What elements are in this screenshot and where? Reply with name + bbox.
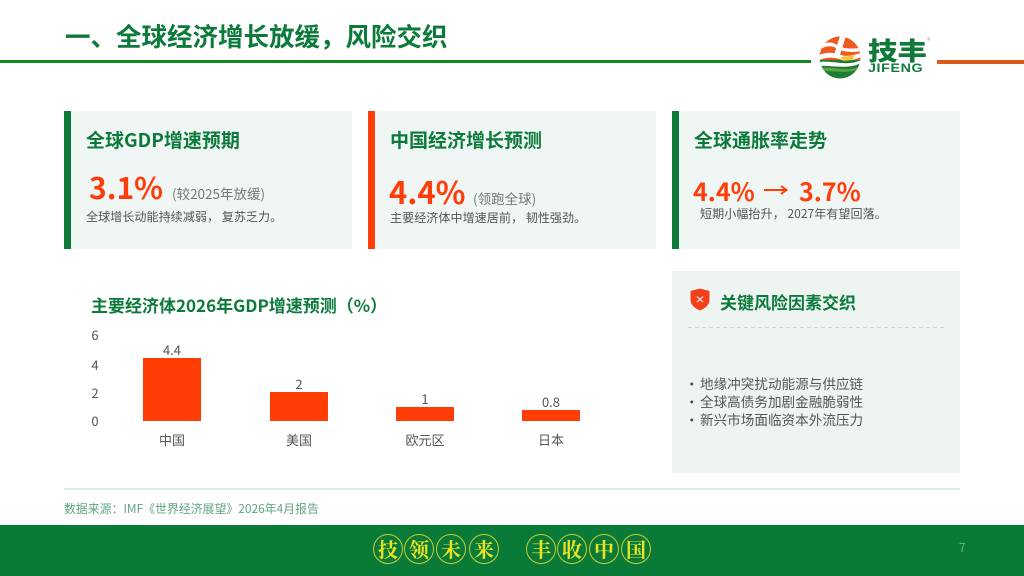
bar: China 4.4: 中国 xyxy=(159,430,185,449)
slogan: 技领未来 丰收中国: 来 xyxy=(474,534,494,563)
risk item: • xyxy=(685,409,699,429)
y axis labels xyxy=(91,325,99,430)
bar chart xyxy=(91,325,580,449)
panel: global inflation trend xyxy=(672,111,960,249)
header green rule xyxy=(0,60,811,63)
slogan: 技领未来 丰收中国: 领 xyxy=(409,534,429,563)
slogan: 技领未来 丰收中国 xyxy=(373,534,651,564)
title: 一、全球经济增长放缓，风险交织 xyxy=(65,17,448,54)
y axis labels: 2 xyxy=(91,383,99,402)
risk item: 地缘冲突扰动能源与供应链 xyxy=(700,373,863,393)
bar: USA 2: 美国 xyxy=(286,430,312,449)
y axis labels: 6 xyxy=(91,325,99,344)
slogan: 技领未来 丰收中国: 中 xyxy=(594,534,614,563)
slogan: 技领未来 丰收中国: 国 xyxy=(626,534,646,563)
bar: Japan 0.8: 日本 xyxy=(538,430,564,449)
y axis labels: 0 xyxy=(91,411,99,430)
figure note: (领跑全球) xyxy=(473,188,536,208)
slogan: 技领未来 丰收中国: 丰 xyxy=(531,534,551,563)
description: 短期小幅抬升， 2027年有望回落。 xyxy=(700,205,887,222)
card heading: 全球通胀率走势 xyxy=(694,126,827,153)
footer divider xyxy=(64,488,960,490)
accent bar xyxy=(64,111,71,249)
risk item: • xyxy=(685,391,699,411)
logo name: 技丰 xyxy=(868,32,927,68)
description: 全球增长动能持续减弱， 复苏乏力。 xyxy=(86,208,282,225)
logo emblem xyxy=(820,36,860,78)
dashed divider xyxy=(688,327,944,328)
accent bar xyxy=(672,111,679,249)
logo registered mark: ® xyxy=(927,36,930,46)
risk item: • xyxy=(685,373,699,393)
data source: 数据来源：IMF《世界经济展望》2026年4月报告 xyxy=(64,500,319,517)
key figure target: 3.7% xyxy=(799,173,861,209)
slogan: 技领未来 丰收中国: 未 xyxy=(441,534,461,563)
logo: JIFENG xyxy=(820,32,930,78)
logo latin name: JIFENG xyxy=(868,63,923,75)
risk item: 新兴市场面临资本外流压力 xyxy=(700,409,863,429)
bar: China 4.4 xyxy=(143,340,201,449)
icon: shield xyxy=(690,288,710,310)
panel: global GDP forecast xyxy=(64,111,352,249)
risk heading: 关键风险因素交织 xyxy=(720,289,856,314)
bar: Eurozone 1: 1 xyxy=(421,389,429,408)
y axis labels: 4 xyxy=(91,355,99,374)
trend arrow xyxy=(764,185,788,195)
bar: Japan 0.8: 0.8 xyxy=(542,392,560,411)
panel: China growth forecast xyxy=(368,111,656,249)
risk item: 全球高债务加剧金融脆弱性 xyxy=(700,391,863,411)
bar: China 4.4: 4.4 xyxy=(163,340,181,359)
key figure: 4.4% xyxy=(389,168,466,213)
bar: USA 2: 2 xyxy=(295,374,303,393)
description: 主要经济体中增速居前， 韧性强劲。 xyxy=(390,209,586,226)
bar: Japan 0.8 xyxy=(522,392,580,449)
card heading: 全球GDP增速预期 xyxy=(86,126,240,153)
footer band xyxy=(0,525,1024,576)
header orange rule xyxy=(937,60,1024,64)
bar: Eurozone 1 xyxy=(396,389,454,449)
panel: key risk factors xyxy=(672,271,960,473)
key figure: 4.4% xyxy=(693,173,755,209)
slogan: 技领未来 丰收中国: 收 xyxy=(562,534,582,563)
key figure: 3.1% xyxy=(89,164,163,208)
figure note: (较2025年放缓) xyxy=(172,183,265,203)
page number: 7 xyxy=(959,539,966,556)
chart heading: 主要经济体2026年GDP增速预测（%） xyxy=(91,292,387,317)
bar: USA 2 xyxy=(270,374,328,449)
risk list xyxy=(685,373,863,429)
card heading: 中国经济增长预测 xyxy=(390,126,542,153)
slogan: 技领未来 丰收中国: 技 xyxy=(378,534,398,563)
accent bar xyxy=(368,111,375,249)
bar: Eurozone 1: 欧元区 xyxy=(405,430,444,449)
